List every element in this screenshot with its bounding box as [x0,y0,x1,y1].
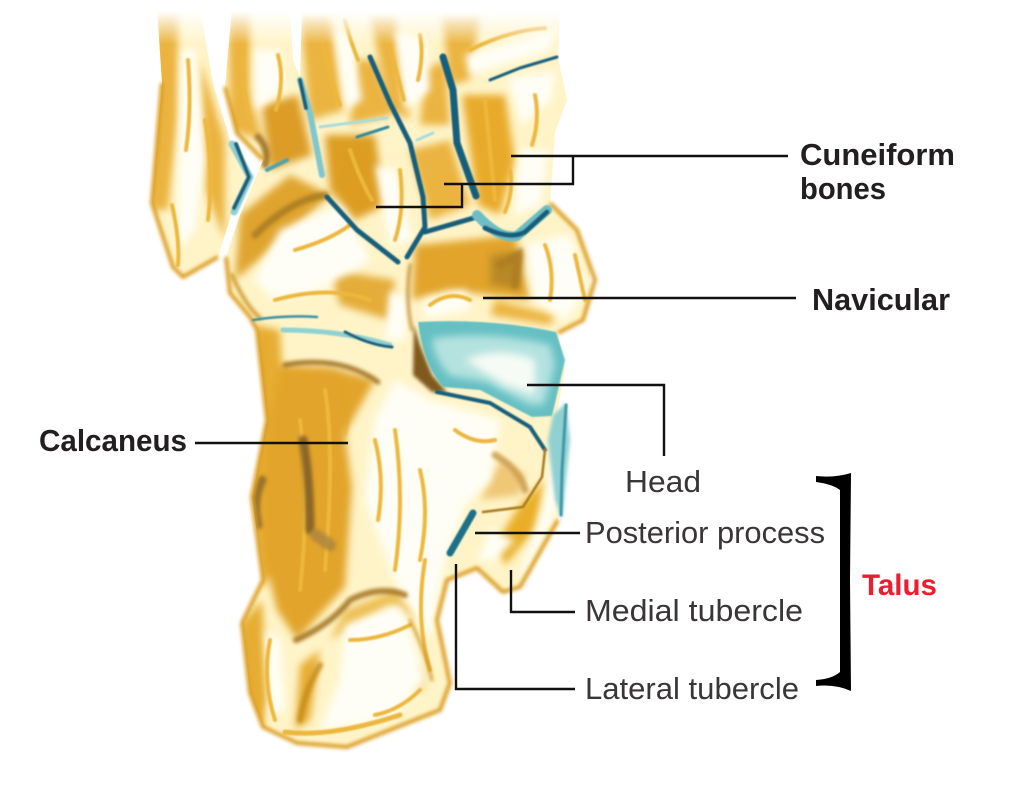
label: Lateral tubercle: Lateral tubercle [585,671,799,706]
label: bones: bones [800,171,886,206]
bone outline: gold edge [152,83,595,747]
illustration: foot bones [140,0,595,760]
bone highlights: white painted areas [178,30,588,730]
top fade [140,0,580,44]
cartilage: talus head [418,321,565,417]
bracket: Talus [816,473,851,691]
shading: dark recess beside talar head [413,325,447,392]
label: Head: Head [625,464,701,499]
bone colouring: calcaneus gold shading [240,325,545,735]
label: Navicular: Navicular [812,282,950,317]
label: Talus: Talus [862,569,937,602]
leader lines [195,156,796,689]
bone colouring: forefoot gold shading [150,10,555,325]
bone base: cream silhouette [140,0,590,760]
label: Calcaneus: Calcaneus [39,423,187,458]
label: Cuneiform: Cuneiform [800,137,955,172]
bone texture: dark brush strokes [232,137,525,720]
label: Medial tubercle: Medial tubercle [585,593,803,628]
joint lines: blue articular gaps [232,57,566,553]
cartilage: medial talar strip [548,403,570,520]
bone texture: gold brush streaks [172,20,585,733]
label: Posterior process: Posterior process [585,515,825,550]
